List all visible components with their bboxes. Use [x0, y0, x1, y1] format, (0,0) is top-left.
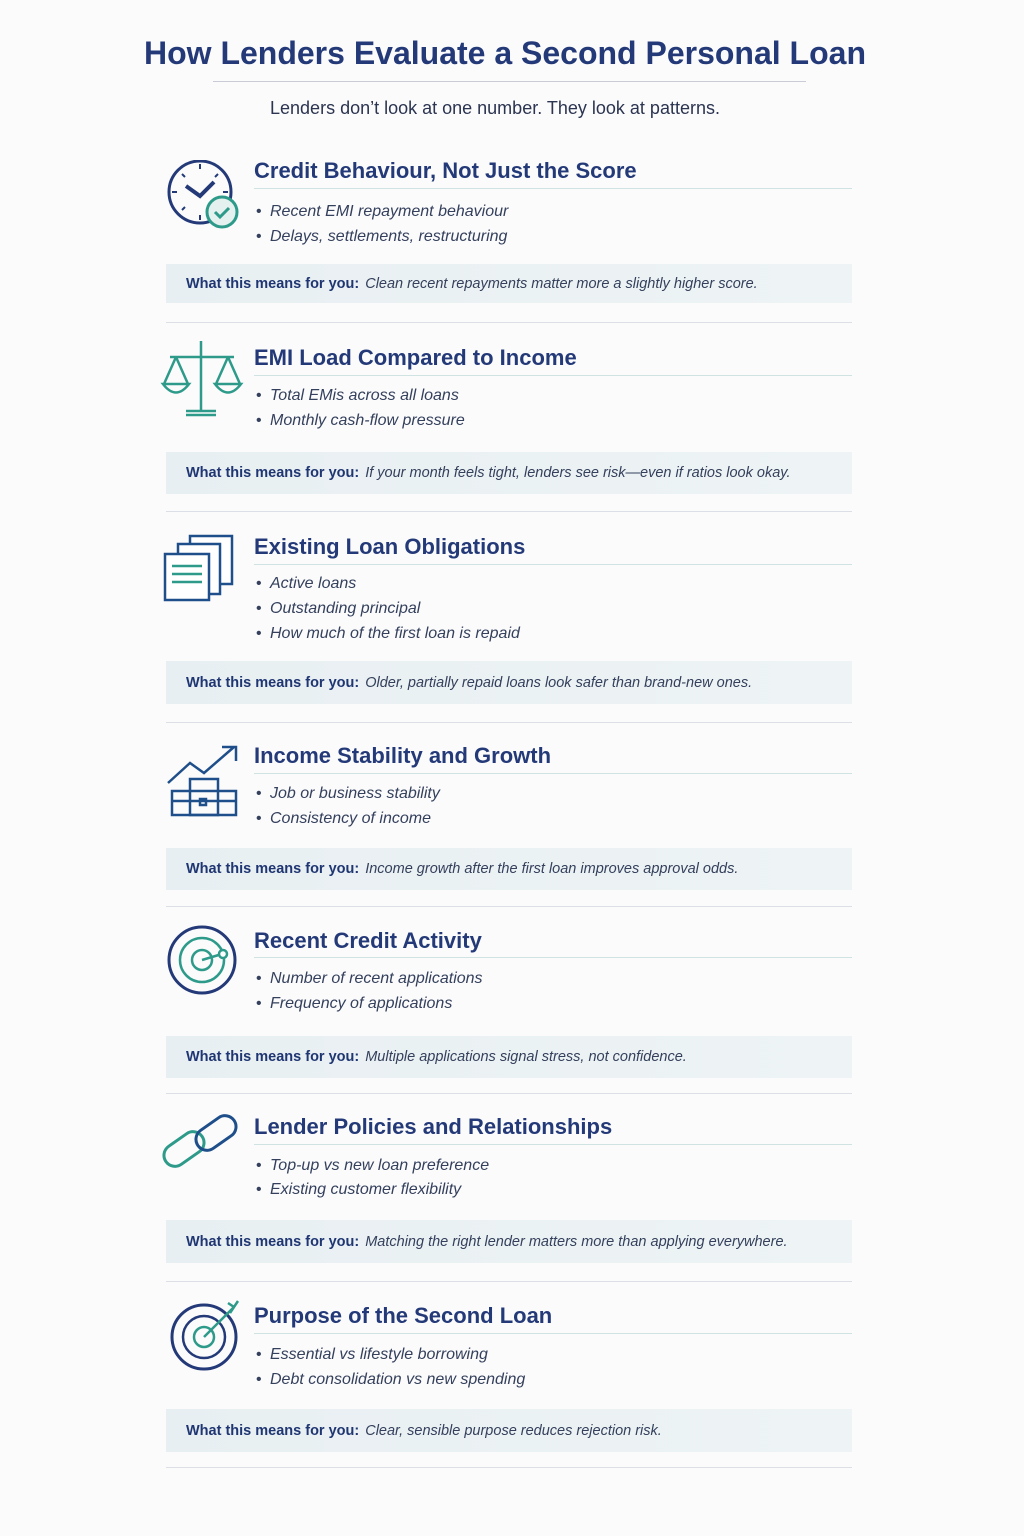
- bullets: Number of recent applications: [270, 970, 483, 987]
- icon: documents: [164, 534, 234, 602]
- icon: target with arrow: [170, 1300, 239, 1370]
- section 3: existing loans: •: [256, 625, 262, 642]
- section 2: EMI load: [160, 341, 852, 512]
- bullets: •: [256, 970, 262, 987]
- section 1: credit behaviour: •: [256, 228, 262, 245]
- section 5: recent credit activity: •: [256, 995, 262, 1012]
- callout: [166, 452, 852, 494]
- section 2: EMI load: Monthly cash-flow pressure: [270, 412, 465, 429]
- callout: Clear, sensible purpose reduces rejection risk.: [365, 1422, 662, 1438]
- section 5: recent credit activity: [166, 926, 852, 1094]
- bullets: •: [256, 785, 262, 802]
- callout: Clean recent repayments matter more a slightly higher score.: [365, 276, 758, 292]
- bullets: •: [256, 387, 262, 404]
- section 4: income stability: •: [256, 810, 262, 827]
- section 1: credit behaviour: [166, 158, 852, 323]
- callout: [166, 264, 852, 303]
- bullets: Top-up vs new loan preference: [270, 1157, 489, 1174]
- bullets: Active loans: [270, 575, 356, 592]
- bullets: Essential vs lifestyle borrowing: [270, 1346, 488, 1363]
- callout: [166, 1220, 852, 1263]
- section 7: purpose: Debt consolidation vs new spending: [270, 1371, 525, 1388]
- section 3: existing loans: [164, 534, 852, 723]
- callout: Older, partially repaid loans look safer than brand-new ones.: [365, 674, 752, 690]
- callout: What this means for you:: [186, 276, 359, 292]
- section 4: income stability: [166, 743, 852, 907]
- icon: chain link: [162, 1114, 238, 1168]
- icon: radar: [168, 926, 236, 994]
- bullets: •: [256, 1157, 262, 1174]
- callout: [166, 848, 852, 890]
- heading: Purpose of the Second Loan: [254, 1303, 552, 1328]
- subtitle: Lenders don’t look at one number. They look at patterns.: [270, 98, 720, 118]
- callout: What this means for you:: [186, 1422, 359, 1438]
- title: How Lenders Evaluate a Second Personal Loan: [144, 35, 866, 71]
- bullets: •: [256, 1346, 262, 1363]
- bullets: Total EMis across all loans: [270, 387, 459, 404]
- callout: [166, 1036, 852, 1078]
- callout: What this means for you:: [186, 465, 359, 481]
- section 6: lender policies: [162, 1114, 852, 1282]
- heading: EMI Load Compared to Income: [254, 345, 577, 370]
- callout: What this means for you:: [186, 1234, 359, 1250]
- heading: Existing Loan Obligations: [254, 534, 525, 559]
- section 1: credit behaviour: Delays, settlements, restructuring: [270, 228, 507, 245]
- section 5: recent credit activity: Frequency of applications: [270, 995, 452, 1012]
- icon: growth briefcase: [167, 746, 238, 816]
- callout: Multiple applications signal stress, not confidence.: [365, 1049, 687, 1065]
- section 3: existing loans: •: [256, 600, 262, 617]
- section 4: income stability: Consistency of income: [270, 810, 431, 827]
- section 3: existing loans: Outstanding principal: [270, 600, 420, 617]
- section 3: existing loans: How much of the first loan is repaid: [270, 625, 520, 642]
- callout: If your month feels tight, lenders see risk—even if ratios look okay.: [365, 465, 790, 481]
- bullets: •: [256, 575, 262, 592]
- heading: Credit Behaviour, Not Just the Score: [254, 158, 637, 183]
- section 7: purpose: [166, 1300, 852, 1468]
- section 7: purpose: •: [256, 1371, 262, 1388]
- bullets: Job or business stability: [270, 785, 440, 802]
- heading: Income Stability and Growth: [254, 743, 551, 768]
- callout: Matching the right lender matters more than applying everywhere.: [365, 1234, 788, 1250]
- icon: scales: [160, 341, 244, 416]
- heading: Lender Policies and Relationships: [254, 1114, 612, 1139]
- callout: What this means for you:: [186, 1049, 359, 1065]
- section 6: lender policies: •: [256, 1181, 262, 1198]
- callout: What this means for you:: [186, 861, 359, 877]
- icon: clock with check: [168, 160, 238, 228]
- section 6: lender policies: Existing customer flexibility: [270, 1181, 461, 1198]
- bullets: •: [256, 203, 262, 220]
- callout: Income growth after the first loan improves approval odds.: [365, 861, 738, 877]
- callout: [166, 1409, 852, 1452]
- heading: Recent Credit Activity: [254, 928, 482, 953]
- section 2: EMI load: •: [256, 412, 262, 429]
- callout: [166, 661, 852, 704]
- callout: What this means for you:: [186, 674, 359, 690]
- bullets: Recent EMI repayment behaviour: [270, 203, 508, 220]
